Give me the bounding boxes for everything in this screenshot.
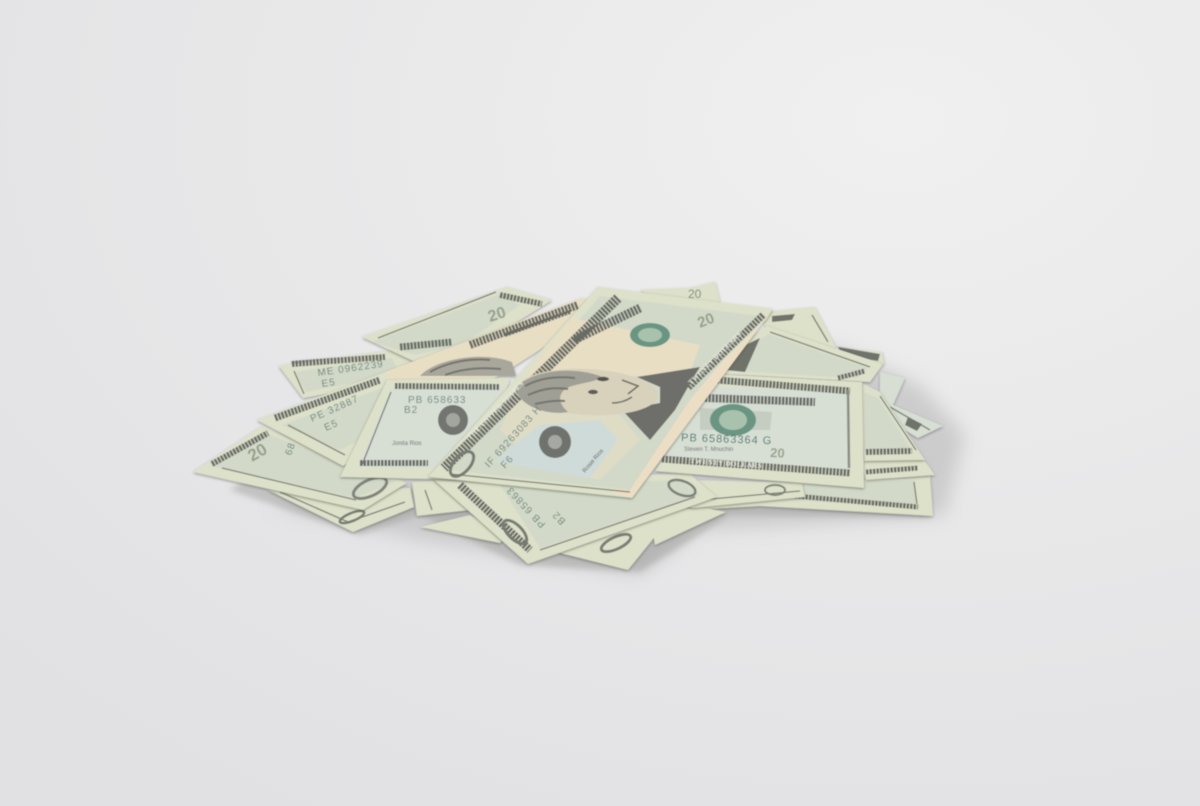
bill: mid left with portrait: [257, 298, 610, 466]
bill: top main with portrait: TWENTY DOLLARS: [687, 330, 743, 386]
bill: back left: [279, 348, 450, 398]
bill: lower left: 20: [244, 440, 270, 465]
bill: mid left with portrait: E5: [323, 418, 340, 434]
bill: top left: 20: [486, 304, 508, 326]
bill: front right: 20: [770, 445, 785, 461]
bill: back left: ME 0962239: [317, 359, 384, 379]
bill: front centre-left: [340, 378, 510, 480]
bill: bottom right fanned: [660, 480, 805, 508]
bill: upper right fanned: [722, 326, 883, 382]
portrait: Andrew Jackson: [516, 365, 700, 440]
bill: front right: TWENTY DOLLARS: [690, 457, 762, 470]
bill: top left: [362, 287, 552, 361]
bill: front right: Steven T. Mnuchin: [684, 447, 733, 453]
bill: back upper right: [765, 307, 884, 364]
bill: top main with portrait: F6: [499, 453, 516, 471]
bill: front centre-left: PB 658633: [408, 395, 466, 406]
bill: bottom centre: B2: [550, 509, 568, 526]
bill: top main with portrait: [428, 287, 773, 498]
bill: front right: PB 65863364 G: [681, 432, 773, 447]
bill: front centre-left: B2: [404, 405, 418, 416]
bill: back right small: [880, 372, 943, 438]
bill: back left: E5: [321, 377, 337, 390]
bill: right stack top: [860, 382, 925, 461]
bill: top main with portrait: Rosie Rios: [582, 448, 605, 474]
soft shadows under the pile: [230, 345, 965, 575]
bill: lower left: 68: [283, 441, 298, 457]
bill: bottom centre: [433, 474, 717, 564]
bill: bottom-centre far: [412, 480, 726, 570]
bill: top main with portrait: THE UNITED STATES: [466, 380, 526, 441]
bill: lower under-left: [268, 488, 414, 532]
bill: bottom centre: PB 65863: [505, 484, 548, 529]
bill: front right: [655, 374, 864, 488]
bill: lower left: [193, 426, 407, 510]
bill: top main with portrait: IF 69263083 H: [483, 404, 544, 470]
bill: right stack middle: [860, 458, 935, 480]
bill: mid left with portrait: PE 32887: [309, 394, 361, 425]
bill: back top: [640, 282, 720, 305]
bill: back top: 20: [688, 287, 702, 301]
money pile: [193, 282, 943, 570]
bill: right stack bottom: [690, 476, 933, 516]
bill: top main with portrait: 20: [695, 310, 717, 332]
bill: front centre-left: Jonita Rios: [392, 441, 422, 447]
